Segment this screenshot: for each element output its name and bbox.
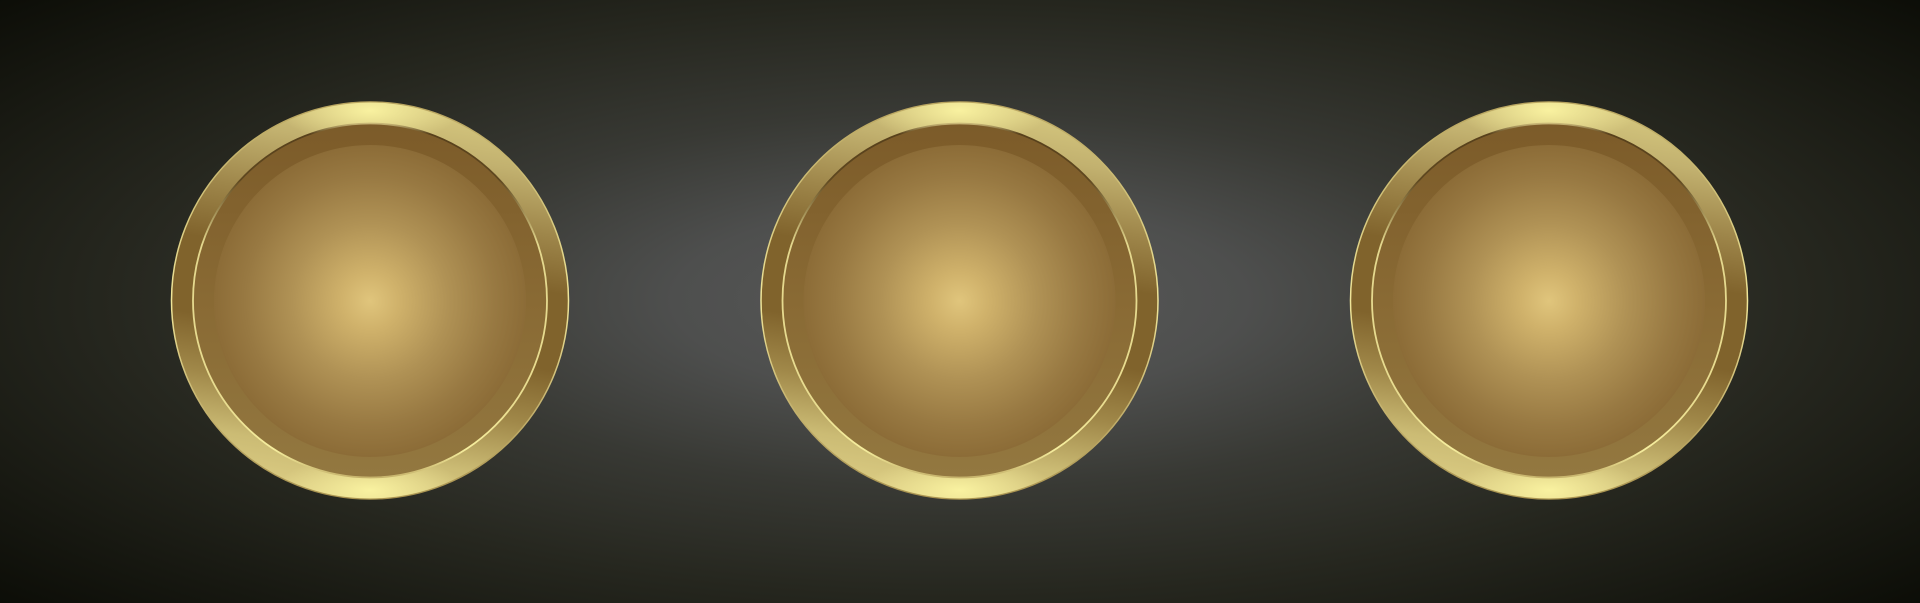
badge 2: centre gold circle xyxy=(760,101,1159,500)
badge 3: right gold circle xyxy=(1350,101,1748,500)
badge 1: left gold circle xyxy=(170,101,570,500)
